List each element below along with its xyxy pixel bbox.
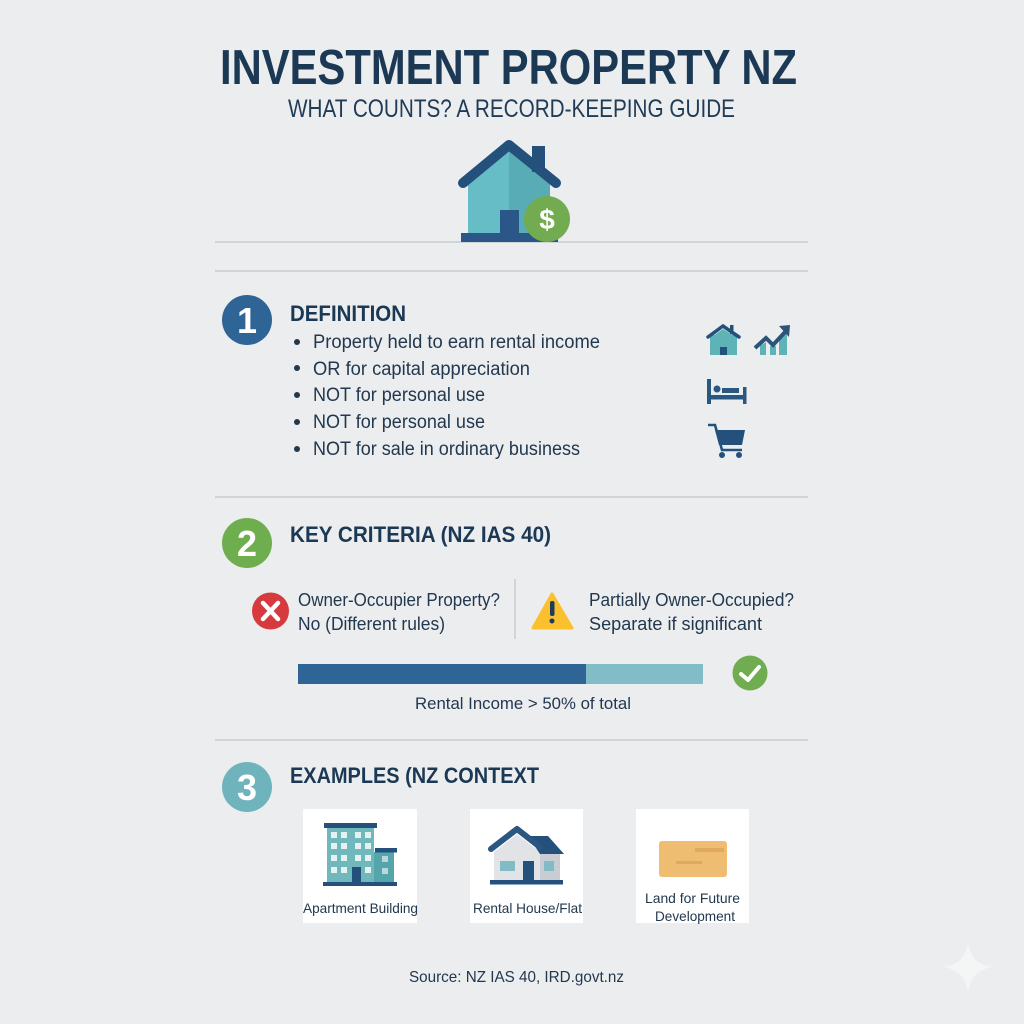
title: INVESTMENT PROPERTY NZ [220, 41, 797, 95]
icon: shopping cart [708, 425, 745, 458]
icon: red cross [252, 592, 289, 630]
text: partially owner-occupied: Partially Owner-Occupied? [589, 590, 794, 610]
card: land for future development: Land for Future [645, 890, 740, 906]
bar: rental income share [298, 664, 703, 684]
badge 2: 2 [237, 523, 257, 564]
badge 1 [222, 295, 272, 345]
subtitle: WHAT COUNTS? A RECORD-KEEPING GUIDE [288, 95, 735, 123]
bullet list: Property held to earn rental income [313, 332, 600, 353]
badge 2 [222, 518, 272, 568]
section 1: definition [222, 295, 790, 460]
icon: bed [707, 379, 746, 404]
card: apartment building [303, 809, 418, 923]
bullet list: NOT for personal use [313, 412, 485, 433]
icon: sparkle watermark [944, 943, 992, 992]
icon: small house [708, 325, 739, 355]
section 3: examples [222, 762, 749, 924]
heading: examples: EXAMPLES (NZ CONTEXT [290, 763, 540, 788]
icon: growth chart [755, 325, 790, 355]
card: land for future development: Development [655, 908, 735, 924]
icon: green check [732, 656, 768, 690]
icon: warning triangle [533, 594, 572, 628]
icon: house with dollar coin [461, 145, 570, 242]
badge 3 [222, 762, 272, 812]
card: rental house: Rental House/Flat [473, 900, 582, 916]
heading: definition: DEFINITION [290, 301, 406, 326]
card: apartment building: Apartment Building [303, 900, 418, 916]
bullet list: NOT for personal use [313, 385, 485, 406]
bullet list [294, 332, 600, 460]
text: owner-occupier [298, 590, 500, 634]
bullet list: OR for capital appreciation [313, 359, 530, 380]
card: land for future development [636, 809, 749, 924]
section 2: key criteria [222, 518, 794, 713]
text: owner-occupier: Owner-Occupier Property? [298, 590, 500, 610]
text: owner-occupier: No (Different rules) [298, 614, 445, 634]
text: partially owner-occupied: Separate if significant [589, 614, 762, 634]
text: partially owner-occupied [589, 590, 794, 634]
bullet list: NOT for sale in ordinary business [313, 439, 580, 460]
card: rental house [470, 809, 583, 923]
badge 3: 3 [237, 767, 257, 808]
bar caption: Rental Income > 50% of total [415, 694, 631, 713]
heading: key criteria: KEY CRITERIA (NZ IAS 40) [290, 522, 551, 547]
icon: house with dollar coin: $ [539, 204, 555, 235]
source note: Source: NZ IAS 40, IRD.govt.nz [409, 969, 624, 986]
badge 1: 1 [237, 300, 257, 341]
